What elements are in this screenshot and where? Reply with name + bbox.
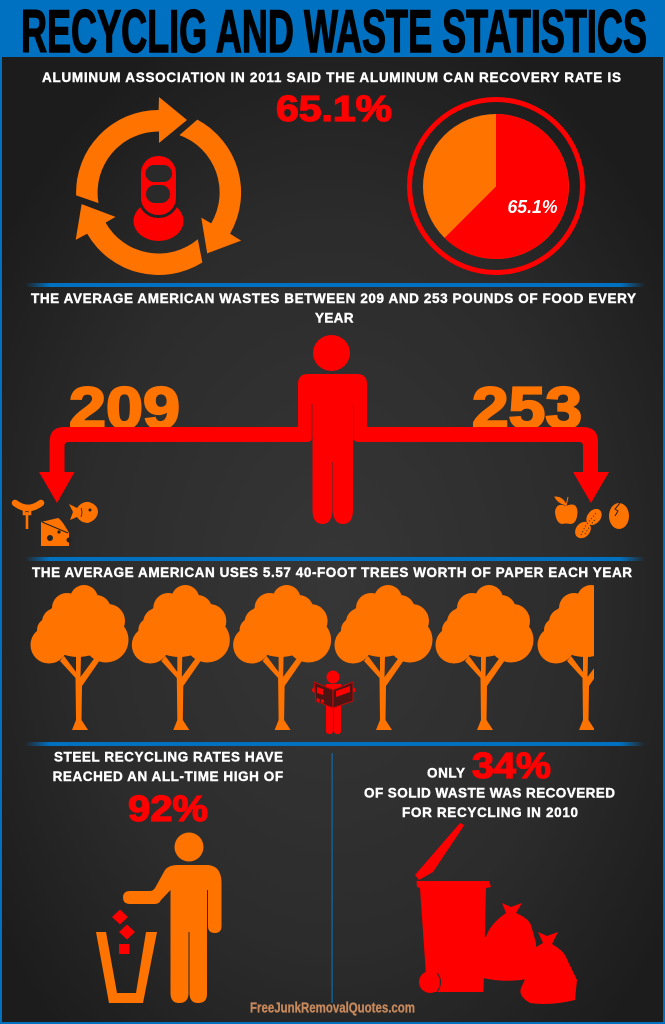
heading: steel: STEEL RECYCLING RATES HAVE [54, 750, 283, 764]
heading: steel [53, 750, 283, 784]
heading: solid waste [364, 766, 615, 820]
pie chart: 65.1%: 65.1% [508, 197, 558, 217]
stat: 65.1%: 65.1% [276, 88, 392, 129]
icon: garbage bags [483, 903, 577, 1004]
figure: person with arrows [39, 335, 609, 524]
stat: 209: 209 [69, 376, 180, 441]
panel: solid waste [364, 745, 615, 1004]
heading: food waste: YEAR [315, 310, 354, 326]
stat: 92%: 92% [128, 788, 208, 829]
stat: 34%: 34% [472, 745, 551, 786]
heading: aluminum: ALUMINUM ASSOCIATION IN 2011 SAID THE ALUMINUM CAN RECOVERY RATE IS [42, 70, 621, 85]
heading: solid waste: OF SOLID WASTE WAS RECOVERED [364, 786, 615, 800]
icon: sausage on fork [15, 503, 41, 529]
icon: falling waste [112, 910, 135, 954]
icon: person reading newspaper [312, 670, 356, 734]
heading: solid waste: FOR RECYCLING IN 2010 [402, 805, 578, 820]
heading: trees: THE AVERAGE AMERICAN USES 5.57 40-FOOT TREES WORTH OF PAPER EACH YEAR [32, 565, 632, 580]
heading: food waste [31, 291, 636, 326]
stat: 253: 253 [472, 376, 582, 441]
icon: wheelie bin [415, 823, 491, 993]
icon: apple [555, 497, 578, 524]
icon: waste bin [96, 932, 157, 1003]
pie chart: 65.1% [410, 100, 582, 272]
icon: cheese [41, 518, 72, 546]
icon: fish [69, 502, 98, 523]
icon: aluminum can top [134, 153, 184, 241]
heading: steel: REACHED AN ALL-TIME HIGH OF [53, 769, 283, 784]
footer credit: FreeJunkRemovalQuotes.com [250, 1000, 415, 1016]
tree row [30, 585, 636, 730]
panel: food waste [15, 291, 636, 546]
panel: paper and trees [30, 565, 636, 734]
panel: aluminum can recovery [42, 70, 621, 312]
icon: peanut [572, 506, 605, 541]
icon: recycling arrows [62, 97, 283, 312]
panel: steel recycling [53, 750, 283, 1003]
heading: food waste: THE AVERAGE AMERICAN WASTES BETWEEN 209 AND 253 POUNDS OF FOOD EVERY [31, 291, 636, 306]
icon: egg [609, 503, 629, 529]
heading: solid waste: ONLY [427, 766, 465, 780]
icon: person disposing waste [123, 832, 222, 1003]
